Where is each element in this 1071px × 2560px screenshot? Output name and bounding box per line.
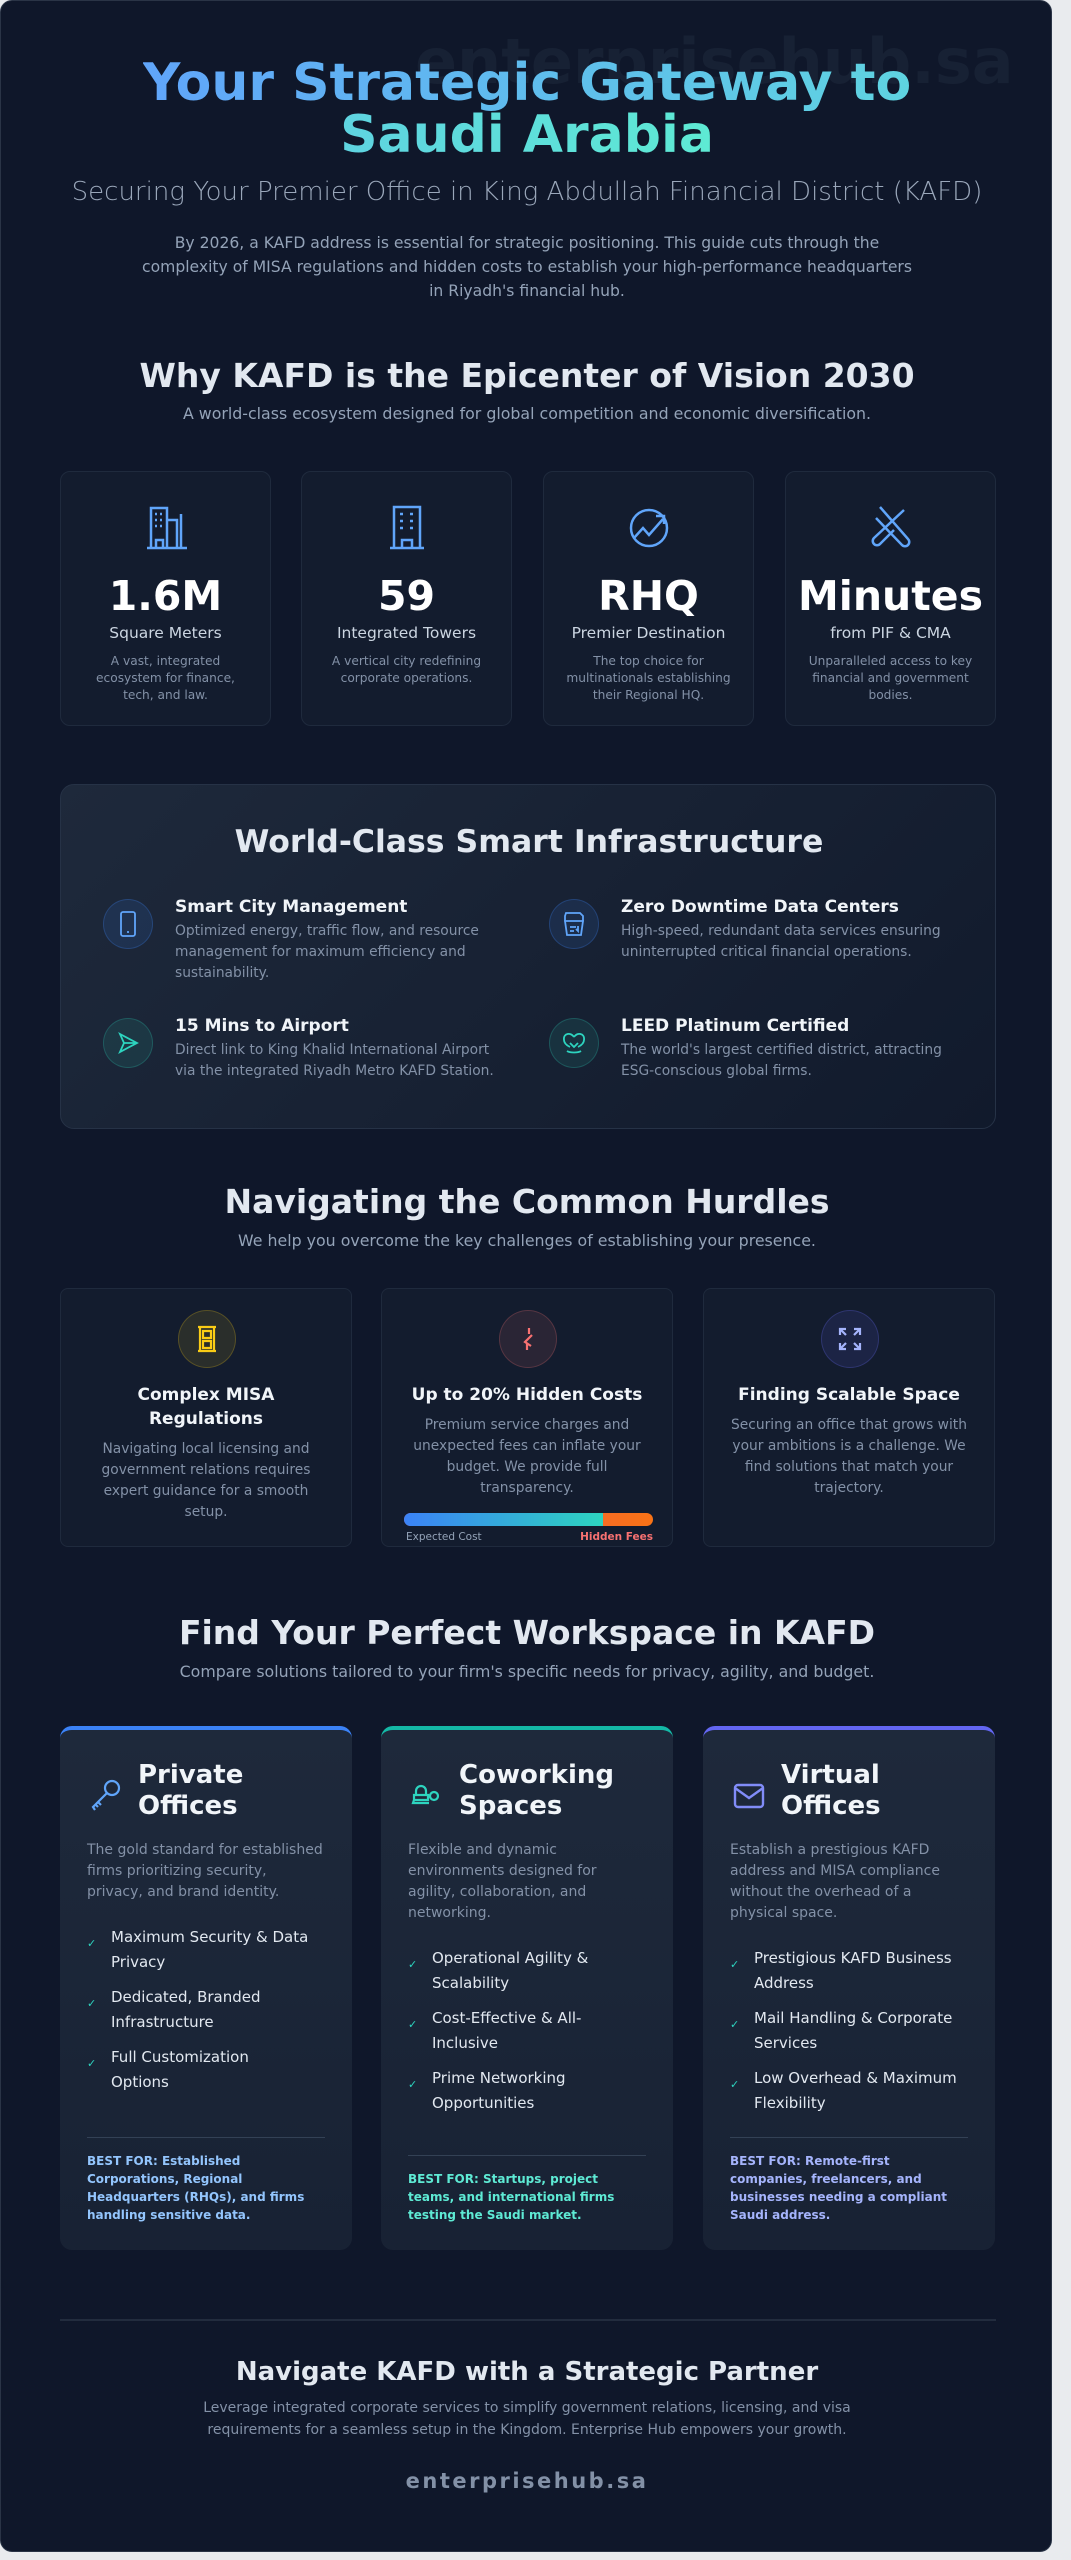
icon: tower — [390, 506, 424, 550]
option card: private offices: The gold standard for established firms prioritizing security, privacy, and brand identity. — [87, 1842, 323, 1900]
hurdle card: MISA — [60, 1288, 352, 1547]
option card: coworking: Coworking — [459, 1760, 614, 1790]
option card: private offices: Offices — [138, 1791, 238, 1821]
stat card: RHQ: RHQ — [598, 572, 699, 620]
option card: virtual offices: Offices — [781, 1791, 881, 1821]
item: data centers — [549, 897, 941, 960]
item: data centers: High-speed, redundant data services ensuring uninterrupted critical financial operations. — [621, 923, 941, 960]
option card: virtual offices: BEST FOR: Remote-first companies, freelancers, and businesses needing a compliant Saudi address. — [730, 2154, 947, 2222]
hurdle card: MISA: Complex MISA — [138, 1385, 274, 1405]
option card: virtual offices: Establish a prestigious KAFD address and MISA compliance without the overhead of a physical space. — [730, 1842, 940, 1921]
title: Saudi Arabia — [340, 105, 714, 165]
option card: coworking: Flexible and dynamic environments designed for agility, collaboration, and networking. — [408, 1842, 597, 1921]
hurdle card: MISA: Navigating local licensing and government relations requires expert guidance for a smooth setup. — [102, 1441, 310, 1520]
option card: private offices: Options — [111, 2072, 169, 2090]
stat card: Minutes: Unparalleled access to key financial and government bodies. — [809, 654, 972, 702]
footer text: Leverage integrated corporate services to simplify government relations, licensing, and visa requirements for a seamless setup in the Kingdom. Enterprise Hub empowers your growth. — [203, 2400, 851, 2438]
stat card: 1.6M — [60, 471, 271, 726]
cost bar chart: Hidden Fees — [580, 1531, 653, 1543]
icon: globe chart — [630, 508, 668, 548]
option card: private offices: Private — [138, 1760, 243, 1790]
subheading: Compare solutions tailored to your firm's specific needs for privacy, agility, and budget. — [180, 1662, 874, 1681]
option card: virtual offices: Prestigious KAFD Business Address — [754, 1949, 952, 1992]
heading: workspace: Find Your Perfect Workspace in KAFD — [179, 1613, 875, 1652]
hurdle card: scalable space: Securing an office that grows with your ambitions is a challenge. We find solutions that match your trajectory. — [731, 1417, 967, 1496]
hurdle card: hidden costs — [381, 1288, 673, 1547]
stat card: Minutes: from PIF & CMA — [830, 624, 951, 642]
item: smart city — [103, 897, 479, 981]
item: data centers: Zero Downtime Data Centers — [621, 897, 899, 917]
panel heading: World-Class Smart Infrastructure — [235, 824, 823, 860]
item: airport: 15 Mins to Airport — [175, 1016, 349, 1036]
icon: coworking — [412, 1784, 440, 1804]
option card: coworking: Operational Agility & Scalability — [432, 1949, 588, 1992]
icon: document — [178, 1310, 236, 1368]
option card: coworking — [381, 1726, 673, 2250]
cost bar chart — [404, 1513, 653, 1543]
option card: coworking: Spaces — [459, 1791, 562, 1821]
stat card: Minutes: Minutes — [798, 572, 983, 620]
item: LEED — [549, 1016, 942, 1079]
intro text: By 2026, a KAFD address is essential for strategic positioning. This guide cuts through the complexity of MISA regulations and hidden costs to establish your high-performance headquarters in Riyadh's financial hub. — [142, 234, 912, 300]
option card: virtual offices: Mail Handling & Corporate Services — [754, 2009, 952, 2052]
hurdle card: scalable space: Finding Scalable Space — [738, 1385, 960, 1405]
option card: coworking: BEST FOR: Startups, project teams, and international firms testing the Saudi market. — [408, 2172, 614, 2222]
icon: key — [92, 1780, 120, 1811]
stat card: 59: 59 — [378, 572, 435, 620]
stat card: RHQ — [543, 471, 754, 726]
footer brand: enterprisehub.sa — [406, 2469, 648, 2493]
option card: private offices: Dedicated, Branded Infrastructure — [111, 1988, 261, 2030]
item: smart city: Optimized energy, traffic flow, and resource management for maximum efficiency and sustainability. — [175, 923, 479, 981]
option card: private offices: Full Customization — [111, 2048, 249, 2066]
item: airport: Direct link to King Khalid International Airport via the integrated Riyadh Metro KAFD Station. — [175, 1042, 494, 1079]
stat card: 1.6M: A vast, integrated ecosystem for finance, tech, and law. — [96, 654, 235, 702]
stat card: 1.6M: Square Meters — [109, 624, 222, 642]
subheading: We help you overcome the key challenges of establishing your presence. — [238, 1231, 816, 1250]
title — [143, 53, 911, 165]
item: LEED: The world's largest certified district, attracting ESG-conscious global firms. — [621, 1042, 942, 1079]
option card: private offices: Maximum Security & Data Privacy — [111, 1928, 308, 1970]
panel: smart infrastructure — [60, 784, 996, 1129]
stat card: 59 — [301, 471, 512, 726]
watermark: enterprisehub.sa — [415, 25, 1014, 98]
icon: envelope — [734, 1784, 764, 1808]
stat card: 59: A vertical city redefining corporate operations. — [332, 654, 481, 685]
hurdle card: scalable space — [703, 1288, 995, 1547]
stat card: Minutes — [785, 471, 996, 726]
item: airport — [103, 1016, 494, 1079]
icon: tools — [872, 506, 910, 548]
option card: coworking: Prime Networking Opportunities — [432, 2069, 566, 2112]
stat card: 1.6M: 1.6M — [109, 572, 222, 620]
option card: coworking: Cost-Effective & All-Inclusive — [432, 2009, 581, 2052]
cost bar chart: Expected Cost — [406, 1531, 482, 1543]
stat card: RHQ: The top choice for multinationals establishing their Regional HQ. — [566, 654, 731, 702]
option card: private offices: BEST FOR: Established Corporations, Regional Headquarters (RHQs), and firms handling sensitive data. — [87, 2154, 304, 2222]
hurdle card: hidden costs: Up to 20% Hidden Costs — [412, 1385, 642, 1405]
hurdle card: MISA: Regulations — [149, 1409, 263, 1429]
heading: why KAFD: Why KAFD is the Epicenter of Vision 2030 — [139, 356, 915, 395]
stat card: 59: Integrated Towers — [337, 624, 476, 642]
heading: hurdles: Navigating the Common Hurdles — [224, 1182, 830, 1221]
hurdle card: hidden costs: Premium service charges and unexpected fees can inflate your budget. We provide full transparency. — [413, 1417, 641, 1496]
stat card: RHQ: Premier Destination — [572, 624, 725, 642]
subheading: A world-class ecosystem designed for global competition and economic diversification. — [183, 404, 871, 423]
item: smart city: Smart City Management — [175, 897, 407, 917]
option card: virtual offices: Virtual — [781, 1760, 880, 1790]
option card: private offices — [60, 1726, 352, 2250]
footer heading: Navigate KAFD with a Strategic Partner — [236, 2357, 818, 2387]
item: LEED: LEED Platinum Certified — [621, 1016, 849, 1036]
subtitle: Securing Your Premier Office in King Abdullah Financial District (KAFD) — [72, 177, 982, 207]
title: Your Strategic Gateway to — [143, 53, 911, 113]
icon: buildings — [147, 506, 187, 550]
icon: expand — [821, 1310, 879, 1368]
icon: money — [499, 1310, 557, 1368]
option card: virtual offices: Low Overhead & Maximum Flexibility — [754, 2069, 957, 2112]
option card: virtual offices — [703, 1726, 995, 2250]
